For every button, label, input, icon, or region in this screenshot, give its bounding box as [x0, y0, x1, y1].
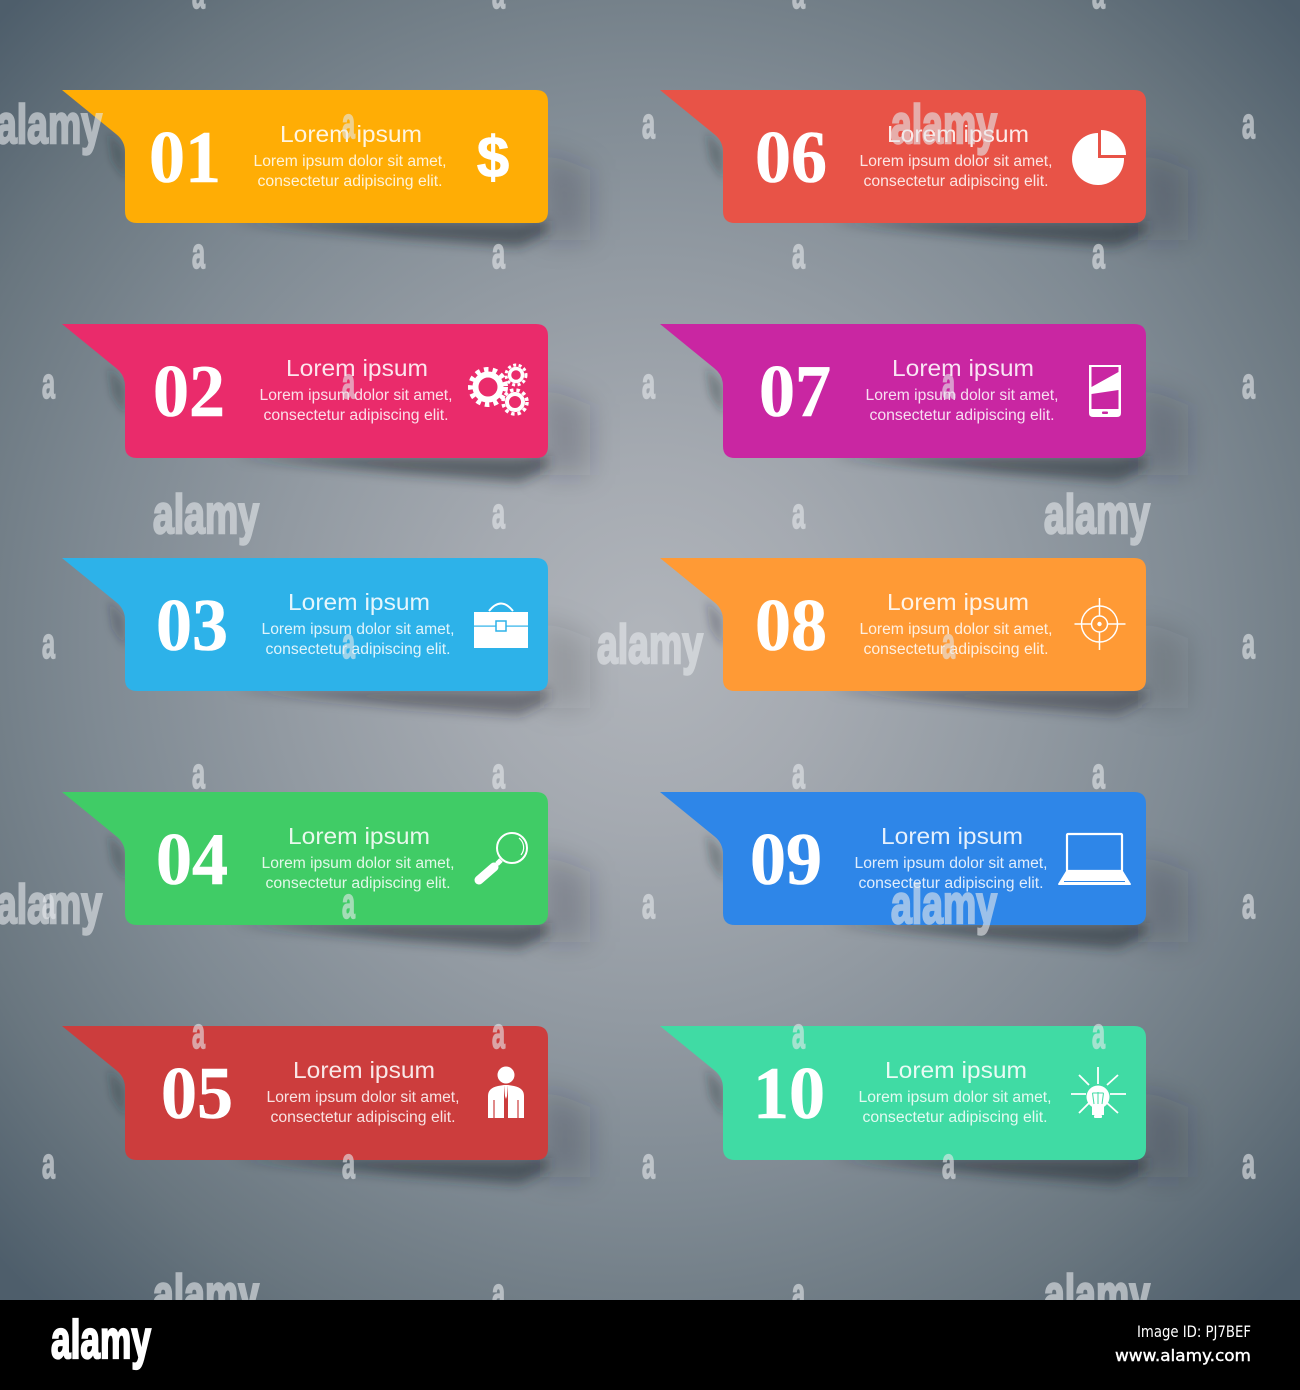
body text 06: consectetur adipiscing elit. [864, 173, 1048, 190]
watermark small letters: a [1242, 99, 1255, 148]
watermark small letters: a [192, 1009, 205, 1058]
watermark small letters: a [792, 489, 805, 538]
panel: card 07 [660, 324, 1188, 482]
panel: card 01 [62, 90, 590, 247]
body text 09: Lorem ipsum dolor sit amet, [854, 855, 1048, 872]
body text 02: Lorem ipsum dolor sit amet, [260, 387, 452, 404]
watermark small letters: a [1092, 229, 1105, 278]
watermark small letters: a [1092, 1009, 1105, 1058]
card 02 shape [62, 324, 548, 458]
card 02 shadow [108, 367, 590, 482]
title 05: Lorem ipsum [293, 1057, 435, 1083]
footer bar [0, 1300, 1300, 1390]
watermark small letters: a [1242, 619, 1255, 668]
icon: gears [470, 365, 527, 414]
watermark small letters: a [42, 359, 55, 408]
icon: laptop [1058, 834, 1131, 885]
watermark small letters: a [642, 1139, 655, 1188]
watermark small letters: a [1242, 879, 1255, 928]
number 05: 05 [161, 1053, 233, 1135]
title 02: Lorem ipsum [286, 355, 428, 381]
body text 10: consectetur adipiscing elit. [862, 1109, 1048, 1126]
icon: light bulb [1071, 1067, 1126, 1118]
title 04: Lorem ipsum [288, 823, 430, 849]
icon: briefcase [474, 604, 528, 648]
panel: card 09 [660, 792, 1188, 949]
body text 04: consectetur adipiscing elit. [266, 875, 450, 892]
number 10: 10 [753, 1053, 825, 1135]
card 03 shape [62, 558, 548, 691]
number 07: 07 [759, 351, 831, 433]
body text 05 [266, 1089, 460, 1126]
card 01 shape [62, 90, 548, 223]
body text 09: consectetur adipiscing elit. [858, 875, 1044, 892]
card 09 shape [660, 792, 1146, 925]
watermark small letters: a [942, 619, 955, 668]
number 01: 01 [149, 117, 221, 199]
watermark small letters: a [192, 229, 205, 278]
title 06: Lorem ipsum [887, 121, 1029, 147]
watermark small letters: a [942, 359, 955, 408]
body text 09 [854, 855, 1048, 892]
watermark small letters: a [42, 1139, 55, 1188]
icon: target [1074, 598, 1126, 650]
number 03: 03 [156, 585, 228, 667]
watermark small letters: a [1092, 749, 1105, 798]
watermark small letters: a [42, 879, 55, 928]
body text 08: consectetur adipiscing elit. [864, 641, 1048, 658]
watermark small letters: a [642, 99, 655, 148]
card 03 shadow [108, 600, 590, 715]
card 06 shape [660, 90, 1146, 223]
card 10 shape [660, 1026, 1146, 1160]
watermark small letters: a [492, 749, 505, 798]
body text 10: Lorem ipsum dolor sit amet, [858, 1089, 1052, 1106]
watermark small letters: a [642, 879, 655, 928]
panel: card 05 [62, 1026, 590, 1184]
watermark large words: alamy [597, 613, 703, 675]
body text 03: Lorem ipsum dolor sit amet, [262, 621, 454, 638]
card 07 shadow [706, 367, 1188, 482]
watermark small letters: a [342, 619, 355, 668]
body text 06 [860, 153, 1052, 190]
number 06: 06 [755, 117, 827, 199]
card 06 shadow [706, 132, 1188, 247]
body text 07: Lorem ipsum dolor sit amet, [866, 387, 1058, 404]
card 07 shape [660, 324, 1146, 458]
icon: smartphone [1089, 365, 1121, 417]
watermark large words: alamy [891, 873, 997, 935]
card 08 shape [660, 558, 1146, 691]
panel: card 08 [660, 558, 1188, 715]
watermark large words: alamy [153, 1263, 259, 1325]
title 09: Lorem ipsum [881, 823, 1023, 849]
watermark small letters: a [342, 1139, 355, 1188]
watermark small letters: a [342, 99, 355, 148]
title 07: Lorem ipsum [892, 355, 1034, 381]
watermark large words: alamy [0, 93, 102, 155]
body text 01 [254, 153, 446, 190]
title 03: Lorem ipsum [288, 589, 430, 615]
watermark small letters: a [792, 229, 805, 278]
watermark small letters: a [792, 1269, 805, 1318]
title 08: Lorem ipsum [887, 589, 1029, 615]
watermark small letters: a [792, 749, 805, 798]
watermark small letters: a [492, 229, 505, 278]
icon: business person [488, 1066, 524, 1118]
body text 07: consectetur adipiscing elit. [870, 407, 1054, 424]
card 05 shape [62, 1026, 548, 1160]
body text 05: consectetur adipiscing elit. [270, 1109, 456, 1126]
panel: card 04 [62, 792, 590, 949]
title 10: Lorem ipsum [885, 1057, 1027, 1083]
card 04 shadow [108, 834, 590, 949]
body text 10 [858, 1089, 1052, 1126]
body text 04 [262, 855, 454, 892]
watermark small letters: a [1242, 359, 1255, 408]
watermark small letters: a [42, 619, 55, 668]
body text 05: Lorem ipsum dolor sit amet, [266, 1089, 460, 1106]
panel: card 10 [660, 1026, 1188, 1184]
watermark small letters: a [342, 879, 355, 928]
number 04: 04 [156, 819, 228, 901]
body text 07 [866, 387, 1058, 424]
watermark large words: alamy [1044, 1263, 1150, 1325]
watermark small letters: a [192, 749, 205, 798]
watermark small letters: a [492, 1269, 505, 1318]
footer logo: alamy [51, 1310, 151, 1370]
number 09: 09 [750, 819, 822, 901]
panel: card 03 [62, 558, 590, 715]
watermark large words: alamy [1044, 483, 1150, 545]
watermark small letters: a [492, 489, 505, 538]
icon: dollar sign: $ [477, 125, 509, 190]
card 09 shadow [706, 834, 1188, 949]
body text 03 [262, 621, 454, 658]
panel: card 06 [660, 90, 1188, 247]
body text 01: Lorem ipsum dolor sit amet, [254, 153, 446, 170]
body text 08: Lorem ipsum dolor sit amet, [860, 621, 1052, 638]
number 08: 08 [755, 585, 827, 667]
body text 06: Lorem ipsum dolor sit amet, [860, 153, 1052, 170]
watermark small letters: a [642, 359, 655, 408]
footer image ID: Image ID: PJ7BEF [1137, 1322, 1251, 1341]
card 08 shadow [706, 600, 1188, 715]
watermark large words: alamy [0, 873, 102, 935]
watermark large words: alamy [153, 483, 259, 545]
card 04 shape [62, 792, 548, 925]
body text 02 [260, 387, 452, 424]
watermark small letters: a [492, 1009, 505, 1058]
icon: magnifying glass [479, 833, 527, 880]
number 02: 02 [153, 351, 225, 433]
icon: pie chart [1072, 130, 1126, 185]
watermark small letters: a [942, 1139, 955, 1188]
footer website: www.alamy.com [1115, 1346, 1251, 1365]
card 01 shadow [108, 132, 590, 247]
card 10 shadow [706, 1069, 1188, 1184]
body text 02: consectetur adipiscing elit. [264, 407, 448, 424]
panel: card 02 [62, 324, 590, 482]
body text 08 [860, 621, 1052, 658]
body text 01: consectetur adipiscing elit. [258, 173, 442, 190]
watermark small letters: a [792, 1009, 805, 1058]
watermark small letters: a [342, 359, 355, 408]
watermark small letters: a [1242, 1139, 1255, 1188]
body text 04: Lorem ipsum dolor sit amet, [262, 855, 454, 872]
watermark large words [0, 93, 1150, 1325]
card 05 shadow [108, 1069, 590, 1184]
body text 03: consectetur adipiscing elit. [266, 641, 450, 658]
title 01: Lorem ipsum [280, 121, 422, 147]
watermark large words: alamy [891, 93, 997, 155]
